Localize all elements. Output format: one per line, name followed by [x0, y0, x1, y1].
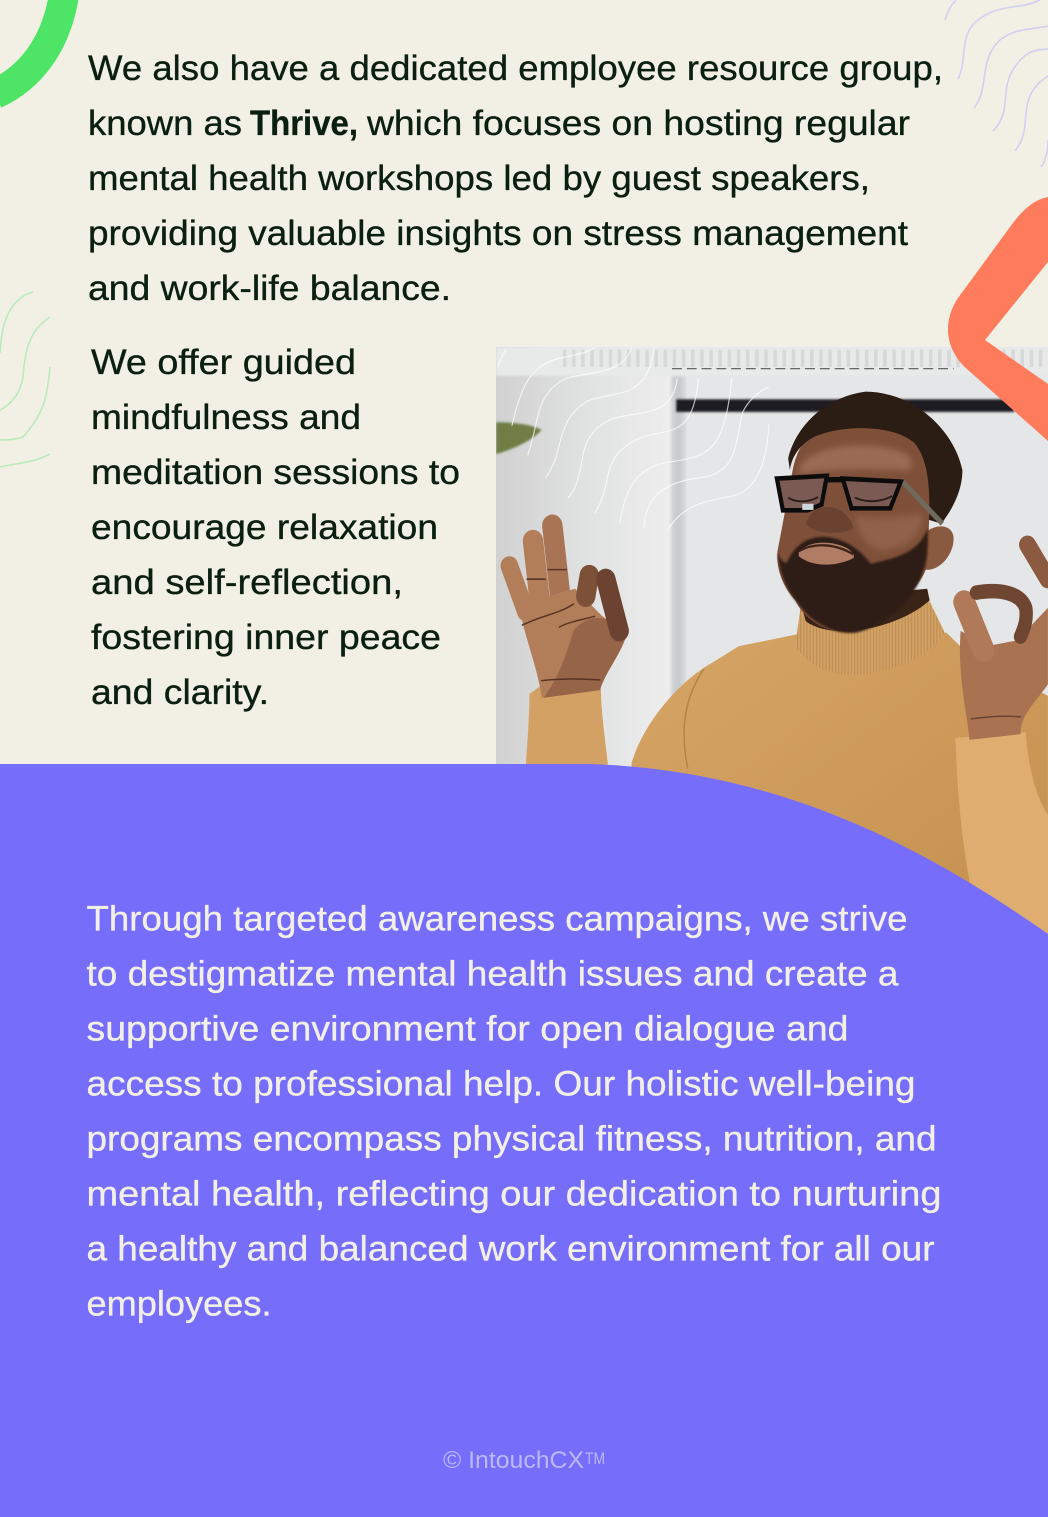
text block: awareness campaigns paragraph: to destigmatize mental health issues and create a — [86, 954, 899, 994]
text block: awareness campaigns paragraph: programs encompass physical fitness, nutrition, and — [86, 1118, 937, 1158]
wall — [496, 347, 672, 806]
left hand — [509, 526, 627, 698]
text block: Thrive paragraph: We also have a dedicated employee resource group, — [88, 48, 943, 88]
text block: mindfulness paragraph: mindfulness and — [91, 397, 361, 437]
forehead highlight — [799, 445, 912, 474]
copyright footer: TM — [585, 1449, 605, 1468]
ceiling pattern band — [496, 347, 685, 376]
window frame column — [672, 374, 684, 795]
text block: awareness campaigns paragraph: employees. — [86, 1284, 272, 1324]
turtleneck — [795, 596, 945, 675]
text block: Thrive paragraph — [88, 48, 943, 308]
copyright footer: © IntouchCX — [443, 1447, 584, 1474]
beard — [778, 528, 928, 633]
text block: Thrive paragraph: Thrive, — [250, 103, 358, 143]
neck shadow — [800, 589, 930, 631]
green squiggles left — [0, 292, 50, 467]
text block: mindfulness paragraph — [91, 342, 460, 712]
orange chevron shape — [948, 197, 1048, 441]
text block: Thrive paragraph: and work-life balance. — [88, 268, 451, 308]
ear — [925, 526, 954, 570]
text block: mindfulness paragraph: and self-reflection, — [91, 562, 403, 602]
green arc — [0, 0, 64, 94]
window background — [684, 376, 1048, 696]
white squiggles on photo — [498, 348, 769, 531]
text block: awareness campaigns paragraph — [86, 898, 942, 1324]
ceiling dashes — [672, 368, 954, 370]
text block: mindfulness paragraph: We offer guided — [91, 342, 356, 382]
plant leaf — [496, 422, 542, 454]
cheek highlight — [855, 514, 922, 550]
text block: Thrive paragraph: which focuses on hosting regular — [366, 103, 910, 143]
purple panel — [0, 764, 1048, 1517]
hair — [788, 392, 962, 524]
text block: Thrive paragraph: providing valuable insights on stress management — [88, 213, 908, 253]
text block: Thrive paragraph: mental health workshops led by guest speakers, — [88, 158, 870, 198]
text block: Thrive paragraph: known as — [88, 103, 242, 143]
text block: awareness campaigns paragraph: mental health, reflecting our dedication to nurturing — [86, 1174, 942, 1214]
sweater shoulder seam — [684, 669, 704, 769]
sweater body — [632, 633, 1048, 952]
text block: awareness campaigns paragraph: access to professional help. Our holistic well-being — [86, 1064, 916, 1104]
text block: awareness campaigns paragraph: Through targeted awareness campaigns, we strive — [86, 898, 907, 938]
text block: mindfulness paragraph: fostering inner peace — [91, 617, 441, 657]
text block: awareness campaigns paragraph: a healthy and balanced work environment for all our — [86, 1228, 935, 1268]
lips — [799, 543, 854, 565]
pattern marks — [563, 350, 1042, 367]
dark window bar — [676, 399, 1014, 412]
purple squiggles top right — [945, 0, 1048, 167]
left sweater cuff — [526, 686, 608, 765]
text block: awareness campaigns paragraph: supportive environment for open dialogue and — [86, 1008, 848, 1048]
text block: mindfulness paragraph: and clarity. — [91, 672, 269, 712]
photo: man meditating — [496, 347, 1048, 952]
text block: mindfulness paragraph: encourage relaxation — [91, 507, 438, 547]
glasses — [777, 476, 942, 524]
mouth line — [799, 545, 853, 554]
text block: mindfulness paragraph: meditation sessions to — [91, 452, 460, 492]
right sleeve — [955, 732, 1048, 952]
face — [777, 415, 930, 631]
nose — [806, 507, 853, 533]
right hand — [960, 545, 1048, 740]
